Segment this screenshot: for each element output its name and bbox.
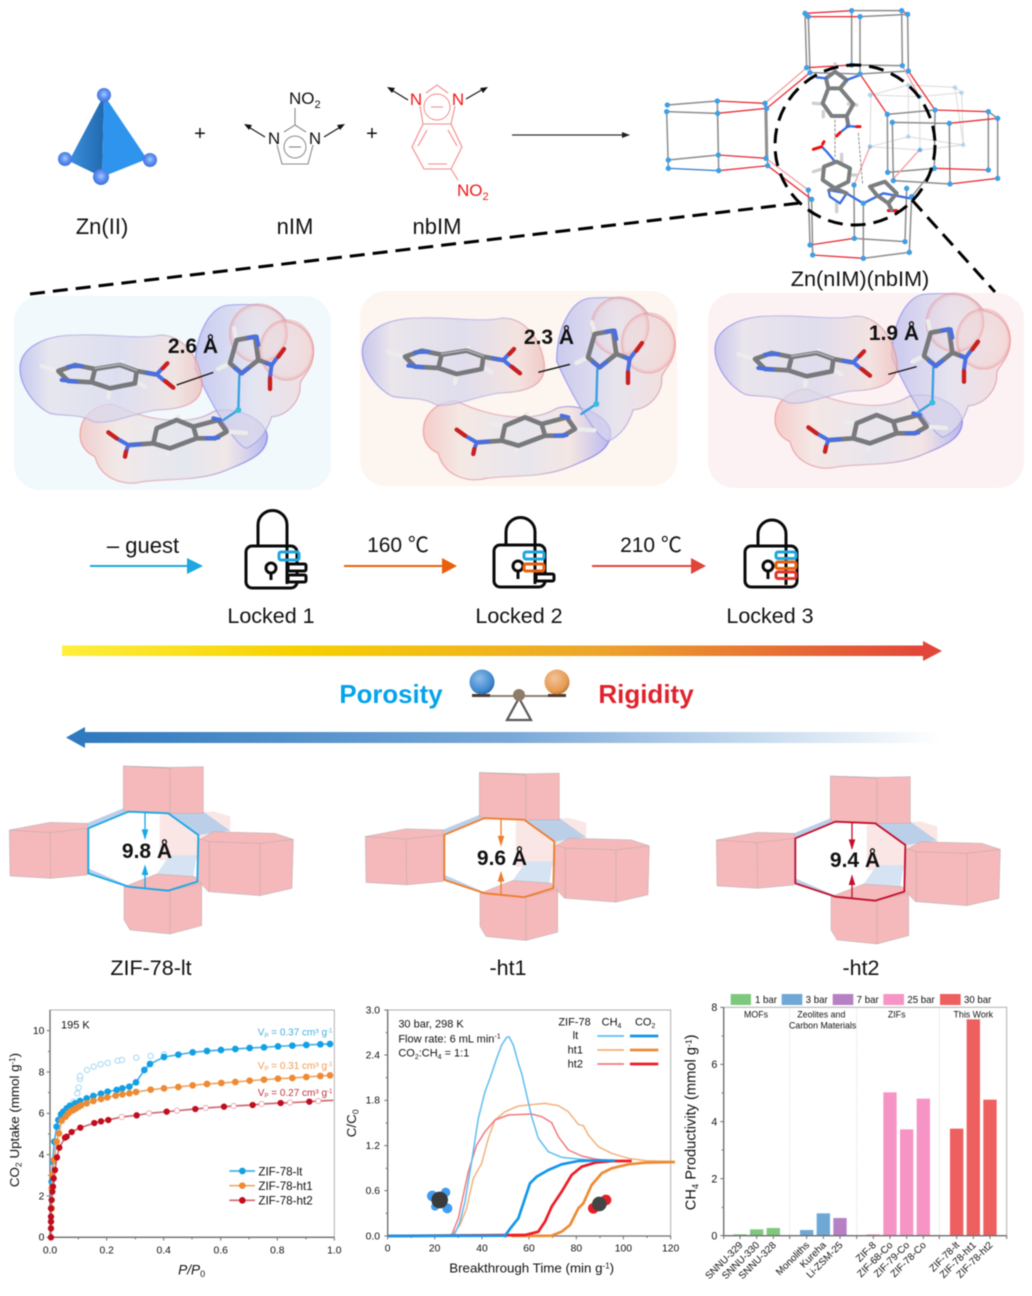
label: nIM: nIM	[277, 214, 313, 239]
series: CO2 curves	[388, 1160, 675, 1236]
x axis title: -1	[603, 1261, 610, 1270]
surface	[715, 292, 1011, 468]
icon: balance scale	[470, 670, 570, 720]
legend: CO	[635, 1017, 651, 1029]
label: Locked 2: Locked 2	[475, 604, 563, 628]
y tick labels: 2	[711, 1173, 717, 1185]
arrow: guest removal	[90, 533, 203, 574]
axis titles: Uptake (mmol g	[7, 1064, 22, 1162]
tick labels: 0.8	[270, 1245, 285, 1256]
distance label: 2.3 Å	[524, 325, 574, 349]
framework: zeolite-like cage network	[664, 8, 1000, 261]
x tick labels: SNNU-329	[704, 1240, 746, 1282]
legend: ZIF-78	[558, 1017, 591, 1029]
grey edges	[667, 11, 998, 258]
tick labels: 0.0	[366, 1231, 380, 1242]
tick labels: 1.0	[327, 1245, 342, 1256]
y tick labels: 4	[711, 1116, 717, 1128]
tick labels: 120	[662, 1244, 680, 1255]
x tick labels: ZIF-78-Co	[889, 1240, 929, 1280]
chart: CH4 productivity bars	[683, 994, 1007, 1282]
x tick labels	[704, 1240, 996, 1282]
structure: nIM linker: 2	[314, 99, 321, 111]
panel: 1.9 A locked structure	[708, 292, 1024, 488]
cage: -ht2 pore	[716, 776, 1000, 944]
tick labels: 100	[615, 1244, 632, 1255]
panel: 2.3 A locked structure	[360, 291, 677, 486]
tick labels: 0	[39, 1233, 45, 1244]
molecules	[388, 322, 642, 454]
tick labels: 2.4	[366, 1050, 380, 1061]
series: ZIF-78-lt	[51, 1044, 330, 1237]
y axis title: 4	[690, 1184, 700, 1189]
chart: CO2 uptake isotherms	[7, 1010, 342, 1279]
structure: nIM linker: N	[309, 129, 321, 148]
structure: nbIM linker: N	[452, 90, 464, 109]
tick labels: 10	[33, 1026, 45, 1037]
arrow: 210 C heating: 210 ℃	[620, 534, 682, 557]
x tick labels: ZIF-68-Co	[856, 1240, 896, 1280]
icon: Locked 1 padlock	[246, 511, 306, 588]
pressure legend: 25 bar	[907, 995, 935, 1006]
pore size label: 9.8 Å	[122, 839, 172, 863]
pressure legend: 1 bar	[755, 995, 778, 1006]
plus sign: +	[194, 123, 206, 145]
arrow: 210 C heating	[592, 534, 706, 574]
category titles: Carbon Materials	[789, 1020, 857, 1030]
pore volume labels: P	[264, 1033, 268, 1039]
label: Porosity: Porosity	[339, 681, 443, 709]
legend: ht2	[568, 1058, 583, 1070]
distance label: 1.9 Å	[869, 321, 919, 345]
plus sign: +	[366, 123, 378, 145]
tick labels: 6	[39, 1109, 45, 1120]
x tick labels: ZIF-78-ht2	[955, 1240, 996, 1281]
pale red edges	[765, 66, 919, 190]
x axis title: 0	[200, 1269, 205, 1279]
legend	[229, 1165, 313, 1208]
series: CH4 curves	[388, 1037, 675, 1236]
open desorption points lt	[74, 1054, 164, 1102]
conditions note	[398, 1018, 501, 1061]
panel: 2.6 A locked structure	[14, 296, 331, 490]
tick labels: 80	[571, 1244, 582, 1255]
label: Locked 3: Locked 3	[726, 604, 814, 628]
series: ZIF-78-ht1	[51, 1075, 330, 1237]
axis titles: C/C	[344, 1114, 359, 1137]
y tick labels: 0	[711, 1230, 717, 1242]
structure: nbIM linker: 2	[482, 191, 489, 203]
axis titles: 0	[351, 1109, 361, 1114]
category titles: This Work	[954, 1010, 994, 1020]
bars	[733, 1019, 997, 1236]
tick labels: 60	[523, 1244, 535, 1255]
legend: CH	[602, 1017, 618, 1029]
x axis title: )	[610, 1260, 614, 1275]
label: Locked 1: Locked 1	[227, 604, 315, 628]
pressure legend: 7 bar	[857, 995, 879, 1006]
molecules	[42, 328, 284, 457]
cage: ZIF-78-lt pore	[9, 766, 293, 934]
label: nbIM: nbIM	[413, 214, 461, 239]
tick labels	[366, 1005, 680, 1255]
axis titles: )	[7, 1053, 22, 1057]
legend	[558, 1017, 658, 1070]
x tick labels: ZIF-78-ht1	[938, 1240, 979, 1281]
pore volume labels: V	[258, 1061, 264, 1072]
category titles: ZIFs	[888, 1010, 906, 1020]
conditions note: -1	[494, 1033, 501, 1040]
x axis title: Breakthrough Time (min g	[449, 1260, 603, 1275]
tick labels: 0.6	[366, 1186, 380, 1197]
tick labels: 0.4	[156, 1245, 171, 1256]
label: Zn(II): Zn(II)	[76, 214, 128, 239]
conditions note: :CH	[419, 1048, 438, 1060]
x tick labels: Li-ZSM-25	[805, 1240, 846, 1281]
conditions note: Flow rate: 6 mL min	[398, 1033, 494, 1045]
label: Zn(nIM)(nbIM): Zn(nIM)(nbIM)	[791, 266, 929, 291]
structure: nIM linker: NO	[289, 89, 314, 108]
arrow: warm gradient trend	[62, 641, 942, 661]
arrow: 160 C heating	[344, 534, 457, 574]
molecules in cage	[813, 64, 910, 212]
label: ZIF-78-lt: ZIF-78-lt	[110, 956, 192, 980]
legend: ZIF-78-lt	[258, 1165, 303, 1178]
legend: ZIF-78-ht1	[258, 1180, 313, 1193]
arrow: 160 C heating: 160 ℃	[367, 534, 429, 557]
category titles	[744, 1010, 994, 1030]
tick labels	[33, 1026, 342, 1256]
x tick labels: ZIF-79-Co	[872, 1240, 912, 1280]
tick labels: 4	[39, 1150, 45, 1161]
pressure legend	[731, 994, 992, 1006]
cage: -ht1 pore	[365, 772, 649, 940]
open points ht2	[122, 1101, 318, 1117]
icon: CH4 molecule	[427, 1188, 452, 1213]
structure: nbIM linker	[387, 85, 489, 203]
tick labels: 1.8	[366, 1096, 380, 1107]
pore volume labels: = 0.37 cm³ g	[268, 1028, 327, 1039]
arrow: guest removal: – guest	[107, 533, 179, 558]
structure: nIM linker	[244, 89, 345, 164]
red edges	[717, 11, 998, 258]
tick labels: 0	[385, 1244, 391, 1255]
icon: CO2 molecule	[588, 1195, 611, 1214]
structure: nbIM linker: NO	[457, 181, 482, 200]
y axis title: )	[684, 1034, 700, 1039]
axis titles: -1	[8, 1057, 17, 1064]
pore volume labels: = 0.31 cm³ g	[268, 1061, 327, 1072]
category titles: Zeolites and	[797, 1010, 845, 1020]
tick labels: 8	[39, 1067, 45, 1078]
legend: ZIF-78-ht2	[258, 1195, 313, 1208]
temperature label: 195 K	[61, 1019, 90, 1031]
structure: nbIM linker: N	[410, 90, 422, 109]
category titles: MOFs	[744, 1010, 769, 1020]
icon: Locked 3 padlock	[745, 520, 797, 587]
conditions note: 4	[438, 1054, 442, 1061]
conditions note: 2	[415, 1054, 419, 1061]
blue zinc nodes	[664, 8, 1000, 261]
label: Rigidity: Rigidity	[598, 679, 694, 709]
icon: Locked 2 padlock	[494, 518, 554, 587]
legend: 4	[618, 1023, 622, 1030]
conditions note: = 1:1	[442, 1048, 469, 1060]
arrow: synthesis	[512, 132, 630, 138]
legend: ht1	[568, 1044, 583, 1056]
pore volume labels: = 0.27 cm³ g	[268, 1088, 327, 1099]
x tick labels: SNNU-328	[737, 1240, 779, 1282]
chart: breakthrough curves	[344, 1005, 680, 1275]
legend: 2	[651, 1023, 655, 1030]
zoom circle and dashed callout lines	[30, 65, 995, 294]
pore volume labels: V	[258, 1028, 264, 1039]
pore volume labels: V	[258, 1088, 264, 1099]
y axis title: -1	[683, 1039, 693, 1047]
legend: lt	[573, 1030, 578, 1042]
y axis title: CH	[684, 1189, 700, 1210]
label: -ht1: -ht1	[489, 956, 527, 980]
pore size label: 9.4 Å	[830, 848, 880, 872]
series: ZIF-78-ht2	[51, 1100, 333, 1237]
tick labels: 40	[476, 1244, 488, 1255]
y tick labels	[711, 1002, 717, 1242]
y axis title: Productivity (mmol g	[684, 1047, 700, 1184]
molecules	[738, 321, 978, 452]
pore volume labels: -1	[327, 1062, 333, 1068]
pressure legend: 3 bar	[806, 995, 828, 1006]
tick labels: 3.0	[366, 1005, 380, 1016]
x tick labels: Kureha	[798, 1240, 829, 1271]
tick labels: 0.2	[99, 1245, 114, 1256]
tick labels: 2	[39, 1191, 45, 1202]
surface	[20, 303, 314, 483]
tick labels: 1.2	[366, 1141, 380, 1152]
axis titles: 2	[14, 1162, 24, 1167]
pore volume labels: P	[264, 1067, 268, 1073]
conditions note: 30 bar, 298 K	[398, 1018, 464, 1030]
structure: nIM linker: N	[268, 129, 280, 148]
tick labels: 20	[429, 1244, 441, 1255]
arrow: blue gradient trend	[66, 727, 940, 748]
x tick labels: ZIF-78-lt	[928, 1240, 962, 1274]
pore volume labels: -1	[327, 1089, 333, 1095]
tick labels: 0.6	[213, 1245, 228, 1256]
x tick labels: SNNU-330	[720, 1240, 762, 1282]
tick labels: 0.0	[43, 1245, 57, 1256]
faded back cube	[870, 85, 963, 150]
pore volume labels: -1	[327, 1029, 333, 1035]
conditions note: CO	[398, 1048, 415, 1060]
y tick labels: 8	[711, 1002, 717, 1014]
x tick labels: ZIF-8	[854, 1240, 879, 1265]
label: -ht2: -ht2	[842, 956, 880, 980]
pressure legend: 30 bar	[964, 995, 992, 1006]
y tick labels: 6	[711, 1059, 717, 1071]
icon: Zn(II) tetrahedron	[58, 88, 157, 185]
pore volume labels	[258, 1028, 333, 1100]
filled points ht2	[51, 1102, 309, 1237]
axis titles: CO	[7, 1167, 22, 1187]
pore volume labels: P	[264, 1094, 268, 1100]
pore size label: 9.6 Å	[477, 846, 527, 870]
surface	[362, 296, 676, 480]
x axis title: P/P	[178, 1262, 201, 1277]
x tick labels: Monoliths	[774, 1240, 812, 1278]
distance label: 2.6 Å	[168, 334, 218, 358]
